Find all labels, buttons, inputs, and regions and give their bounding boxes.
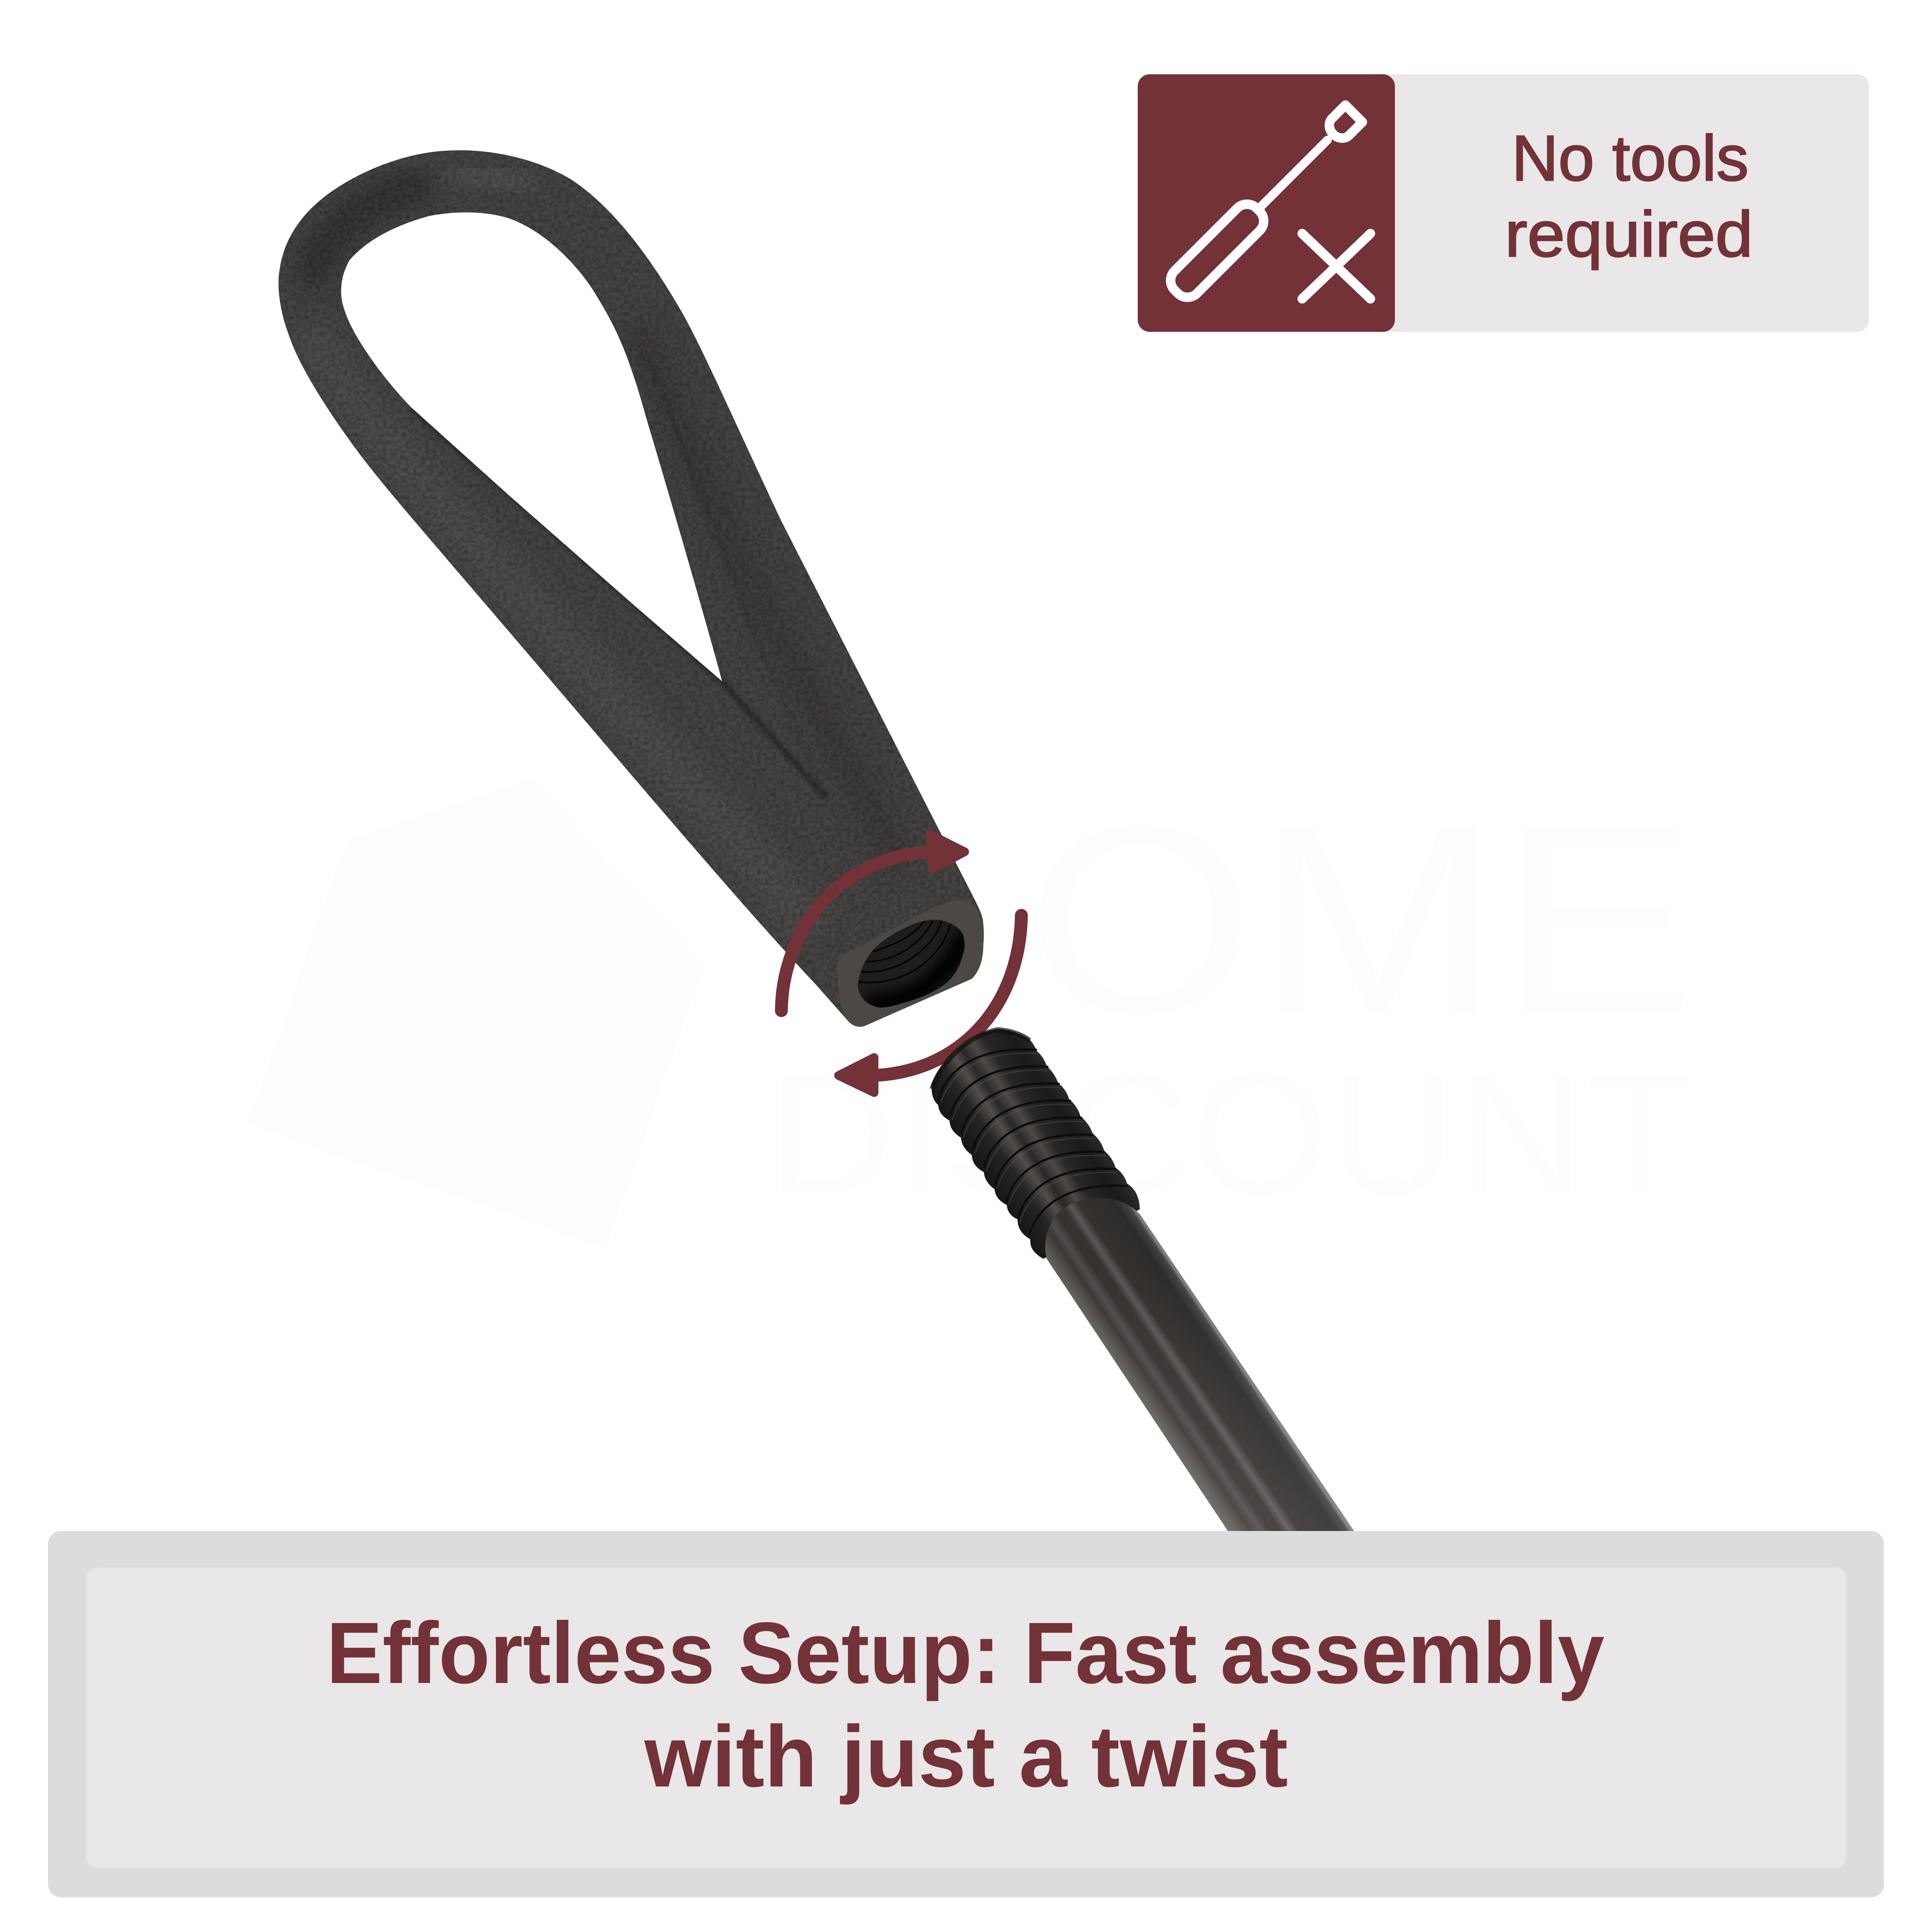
rotation arrow: lower, behind threaded tip xyxy=(838,915,1021,1093)
caption headline: Effortless Setup: Fast assembly xyxy=(326,1604,1604,1702)
threaded rod tip xyxy=(932,1029,1140,1259)
watermark logo: DISCOUNT xyxy=(766,1038,1694,1230)
badge background xyxy=(1138,74,1869,332)
caption outer frame xyxy=(48,1531,1884,1897)
badge text: No tools xyxy=(1512,122,1749,194)
caption inner card xyxy=(86,1567,1846,1868)
panel: bottom caption xyxy=(48,1531,1884,1897)
badge text: required xyxy=(1505,198,1753,270)
handle end face xyxy=(837,900,984,1027)
icon tile xyxy=(1138,74,1395,332)
panel: no tools required badge xyxy=(1138,74,1869,332)
badge text xyxy=(1505,122,1753,270)
watermark logo: OME xyxy=(1026,769,1696,1071)
caption headline: with just a twist xyxy=(644,1708,1288,1805)
black metal rod xyxy=(1045,1198,1354,1531)
rotation arrow: upper xyxy=(781,834,965,1011)
icon: screwdriver with cross xyxy=(1165,105,1370,303)
watermark logo xyxy=(247,769,1696,1249)
threaded bore xyxy=(858,920,965,1008)
loop handle xyxy=(275,146,992,1030)
caption headline xyxy=(326,1604,1604,1805)
